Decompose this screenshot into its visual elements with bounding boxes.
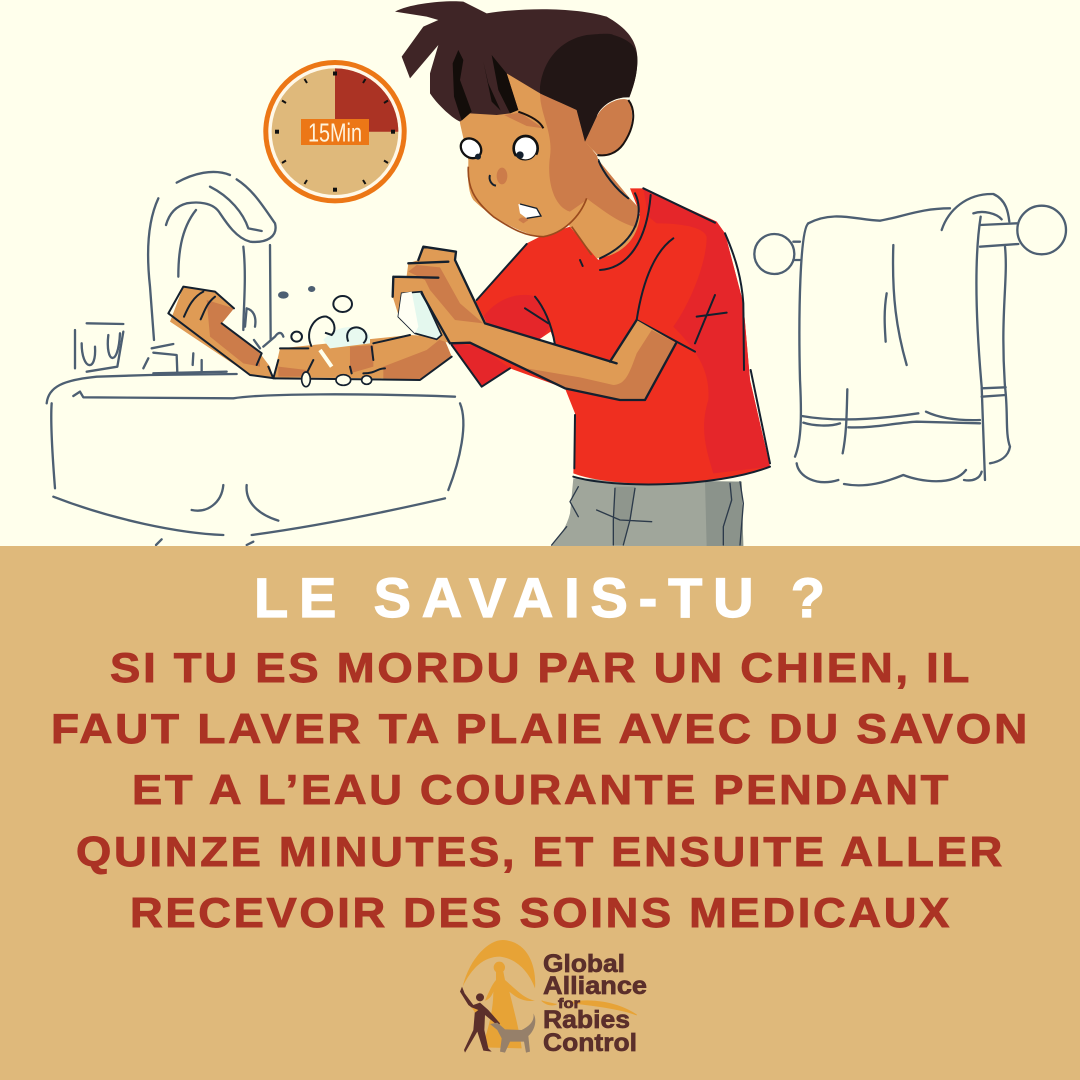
nose — [497, 168, 507, 184]
logo wordmark: Alliance — [543, 972, 647, 1000]
eyebrow — [504, 113, 543, 128]
eyes — [457, 134, 538, 162]
illustration: sink and faucet — [47, 172, 463, 545]
mouth — [518, 217, 528, 223]
logo wordmark: for — [558, 995, 581, 1011]
logo wordmark: Rabies — [543, 1006, 630, 1034]
sink basin — [47, 374, 463, 545]
head and face — [395, 1, 637, 237]
message text: ET A L’EAU COURANTE PENDANT — [132, 766, 951, 813]
logo wordmark: Global — [543, 950, 625, 978]
message text: SI TU ES MORDU PAR UN CHIEN, IL — [110, 644, 972, 691]
message text — [51, 644, 1030, 936]
logo emblem — [460, 940, 637, 1053]
faucet — [143, 172, 283, 373]
message text: RECEVOIR DES SOINS MEDICAUX — [130, 889, 952, 936]
neck — [553, 133, 640, 258]
logo: Global Alliance for Rabies Control — [460, 940, 647, 1057]
boy character — [393, 1, 770, 547]
15 minute label: 15Min — [308, 118, 362, 148]
clock ticks — [275, 72, 395, 192]
trousers — [550, 478, 743, 547]
arm holding soap — [393, 247, 677, 400]
heading: LE SAVAIS-TU ? — [254, 566, 825, 629]
towel on rail — [754, 194, 1066, 485]
logo wordmark — [543, 950, 647, 1057]
jaw line — [468, 167, 587, 237]
soap bubbles — [278, 286, 372, 387]
tan text panel — [0, 546, 1080, 1080]
ear — [585, 99, 632, 155]
message text: FAUT LAVER TA PLAIE AVEC DU SAVON — [51, 705, 1030, 752]
hair — [395, 1, 637, 142]
left forearm — [168, 287, 452, 380]
message text: QUINZE MINUTES, ET ENSUITE ALLER — [76, 828, 1005, 875]
drinking glass — [75, 323, 123, 372]
logo wordmark: Control — [543, 1029, 637, 1057]
timer clock: 15 minutes — [263, 60, 407, 203]
red t-shirt — [452, 188, 770, 484]
